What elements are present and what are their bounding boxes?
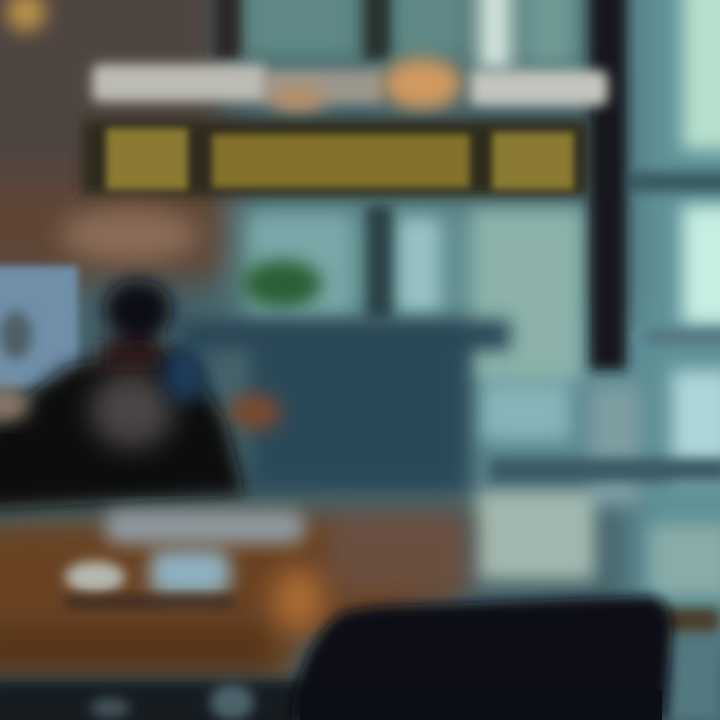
green plant [242,260,322,308]
blue-grey banquette [180,320,510,491]
white sign band [92,64,608,106]
ceiling lamp glow [6,0,46,32]
blue picture on wall [0,266,78,388]
window details [245,0,720,595]
yellow sign band [82,120,588,196]
warm lamp left [60,207,200,263]
wooden table [0,510,470,680]
orange glass [272,568,324,632]
lamps over sign [270,58,462,113]
dark chair foreground [290,596,672,720]
plates and cups on table [65,510,305,608]
seated person [0,280,281,510]
table edge and foreground floor [0,608,720,720]
dark window frames [214,0,720,482]
